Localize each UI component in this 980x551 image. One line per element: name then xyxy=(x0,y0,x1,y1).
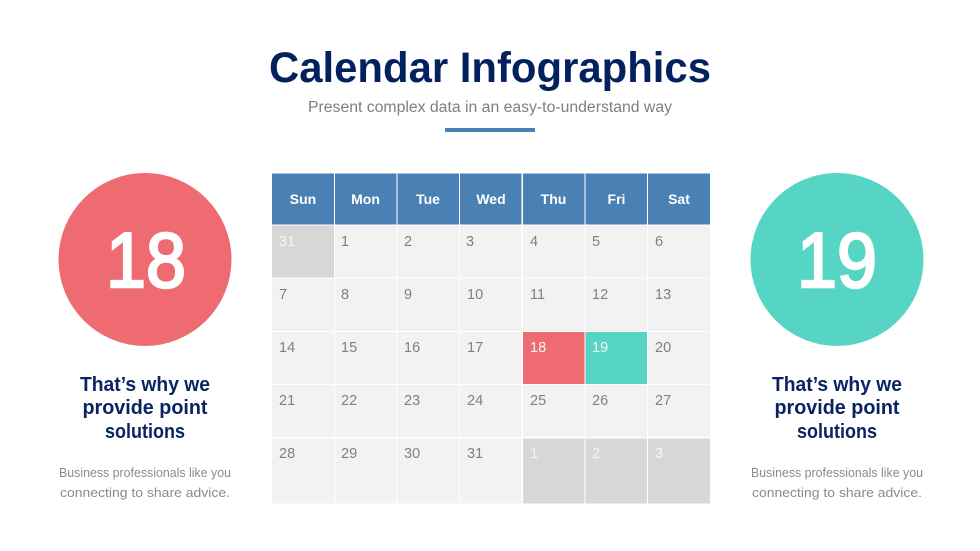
day numbers: 28 xyxy=(279,446,295,462)
day numbers: 1 xyxy=(530,446,538,462)
day numbers: 5 xyxy=(592,234,600,250)
day numbers: 14 xyxy=(279,340,295,356)
day numbers: 1 xyxy=(341,234,349,250)
day numbers: 10 xyxy=(467,287,483,303)
day numbers: 2 xyxy=(404,234,412,250)
day numbers: 12 xyxy=(592,287,608,303)
day numbers: 22 xyxy=(341,393,357,409)
day numbers: 15 xyxy=(341,340,357,356)
day numbers: 18 xyxy=(530,340,546,356)
day numbers: 2 xyxy=(592,446,600,462)
left description: connecting to share advice. xyxy=(60,485,230,500)
day numbers: 24 xyxy=(467,393,483,409)
day numbers: 21 xyxy=(279,393,295,409)
weekday header: Sun xyxy=(290,191,316,207)
panel: left highlight xyxy=(58,173,232,500)
right description: connecting to share advice. xyxy=(752,485,922,500)
day numbers: 13 xyxy=(655,287,671,303)
day numbers: 25 xyxy=(530,393,546,409)
right heading: provide point xyxy=(774,397,900,419)
day numbers: 4 xyxy=(530,234,538,250)
day numbers: 23 xyxy=(404,393,420,409)
right heading: solutions xyxy=(797,421,877,443)
left heading: solutions xyxy=(105,421,185,443)
day numbers: 8 xyxy=(341,287,349,303)
weekday header xyxy=(272,174,710,224)
left description: Business professionals like you xyxy=(59,465,231,480)
left description xyxy=(59,465,231,500)
day numbers: 17 xyxy=(467,340,483,356)
left heading xyxy=(80,374,210,443)
circle badge 18: 18 xyxy=(106,216,186,304)
day numbers: 30 xyxy=(404,446,420,462)
circle badge 19 xyxy=(750,173,924,346)
day numbers: 7 xyxy=(279,287,287,303)
weekday header: Sat xyxy=(668,191,690,207)
panel: right highlight xyxy=(750,173,924,500)
right description: Business professionals like you xyxy=(751,465,923,480)
weekday header: Tue xyxy=(416,191,440,207)
day numbers: 9 xyxy=(404,287,412,303)
right heading: That’s why we xyxy=(772,374,902,396)
day numbers: 29 xyxy=(341,446,357,462)
right heading xyxy=(772,374,902,443)
day numbers: 3 xyxy=(655,446,663,462)
day numbers: 11 xyxy=(530,287,545,303)
day numbers xyxy=(279,234,671,462)
circle badge 19: 19 xyxy=(797,216,877,304)
weekday header: Wed xyxy=(476,191,506,207)
left heading: That’s why we xyxy=(80,374,210,396)
title underline xyxy=(445,128,535,132)
day numbers: 31 xyxy=(279,234,295,250)
day numbers: 19 xyxy=(592,340,608,356)
day numbers: 20 xyxy=(655,340,671,356)
left heading: provide point xyxy=(82,397,208,419)
right description xyxy=(751,465,923,500)
day numbers: 6 xyxy=(655,234,663,250)
circle badge 18 xyxy=(58,173,232,346)
day numbers: 26 xyxy=(592,393,608,409)
day numbers: 31 xyxy=(467,446,483,462)
title: Calendar Infographics xyxy=(269,44,711,92)
subtitle: Present complex data in an easy-to-understand way xyxy=(308,99,672,116)
calendar xyxy=(272,174,710,504)
day numbers: 3 xyxy=(466,234,474,250)
weekday header: Thu xyxy=(541,191,566,207)
weekday header: Fri xyxy=(608,191,625,207)
day cell grid xyxy=(272,226,710,504)
day numbers: 27 xyxy=(655,393,671,409)
day numbers: 16 xyxy=(404,340,420,356)
weekday header: Mon xyxy=(351,191,380,207)
